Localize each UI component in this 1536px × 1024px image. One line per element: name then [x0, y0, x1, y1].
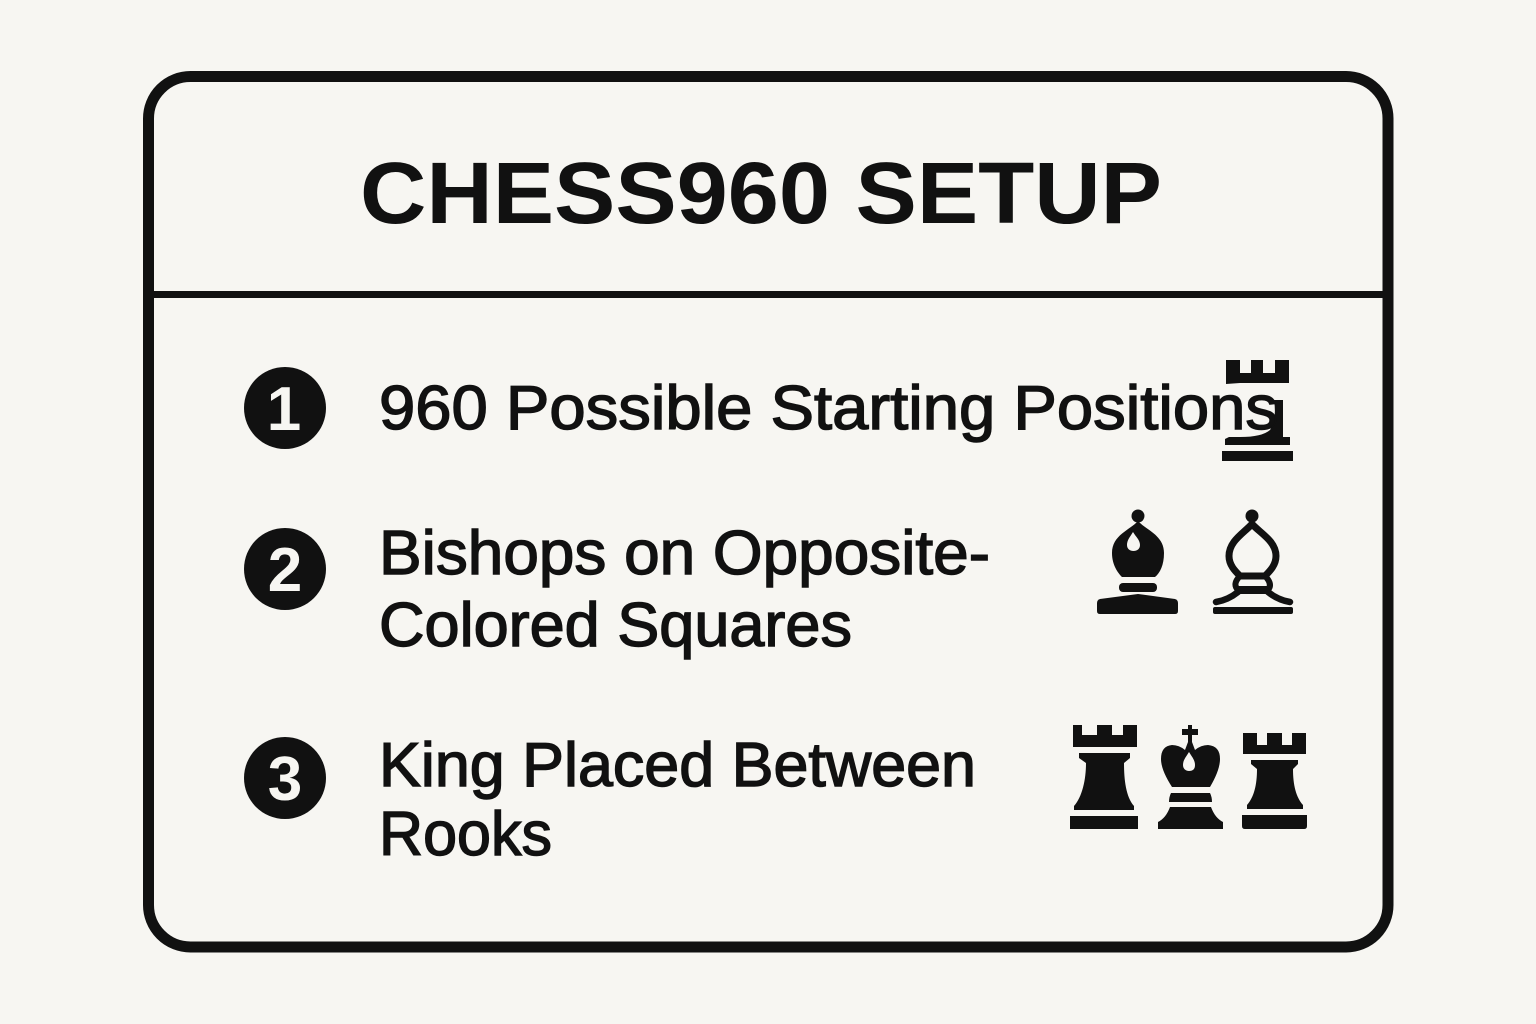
- number badge 3: [244, 737, 326, 819]
- icon: solid bishop: [1097, 510, 1178, 614]
- icon: rook overlapped by text: [1222, 360, 1293, 461]
- icon: outlined bishop: [1213, 510, 1293, 614]
- number badge 2: 2: [268, 536, 302, 605]
- card frame: [148, 76, 1388, 947]
- title: CHESS960 SETUP: [360, 145, 1162, 242]
- number badge 1: [244, 367, 326, 449]
- row 3: king between rooks: [244, 725, 1307, 869]
- row 2 text, second line: Colored Squares: [379, 591, 852, 660]
- row 3 text: King Placed Between: [379, 731, 976, 800]
- row 1: starting positions: [244, 360, 1293, 461]
- number badge 1: 1: [267, 375, 301, 444]
- header divider: [150, 291, 1386, 298]
- number badge 3: 3: [268, 745, 302, 814]
- row 1 text: 960 Possible Starting Positions: [379, 374, 1278, 443]
- icon: right rook: [1242, 733, 1307, 829]
- row 3 text, second line: Rooks: [379, 800, 552, 869]
- panel: chess960 setup card: [148, 76, 1388, 947]
- icon: king: [1158, 725, 1223, 829]
- row 2: bishops: [244, 510, 1293, 660]
- icon: left rook: [1070, 725, 1138, 829]
- row 2 text: Bishops on Opposite-: [379, 519, 990, 588]
- number badge 2: [244, 528, 326, 610]
